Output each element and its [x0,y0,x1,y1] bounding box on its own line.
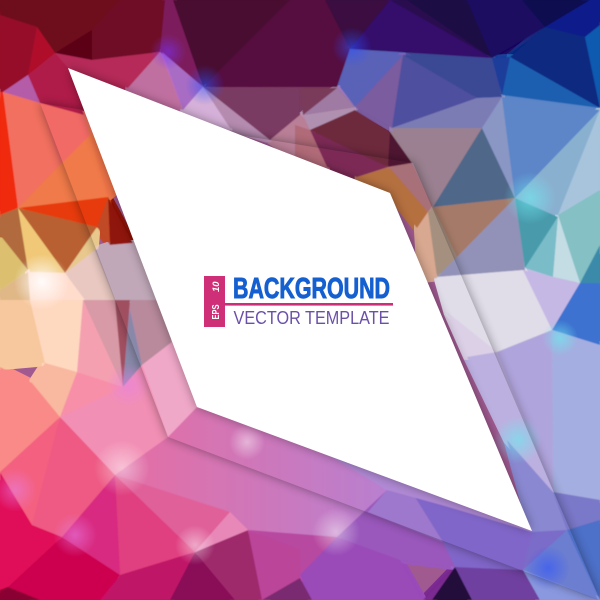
right blue and teal facets [437,97,600,600]
title underline [225,303,393,306]
left red and orange facets [0,75,157,372]
top-left dark red facets [0,0,350,160]
shadow of the back sheet [40,103,600,600]
top-right purple and blue facets [300,0,600,128]
logo badge: EPS 10 [204,276,225,327]
title: BACKGROUND: BACKGROUND [233,273,390,305]
shadow of the white panel [68,68,532,531]
bottom violet facets [248,450,532,600]
lower-left pink facets [0,300,387,600]
logo badge: EPS 10: EPS [211,304,222,320]
logo badge: EPS 10: 10 [211,281,222,292]
white panel [68,68,532,531]
subtitle: VECTOR TEMPLATE: VECTOR TEMPLATE [234,308,390,328]
centre brown facets [295,108,525,280]
